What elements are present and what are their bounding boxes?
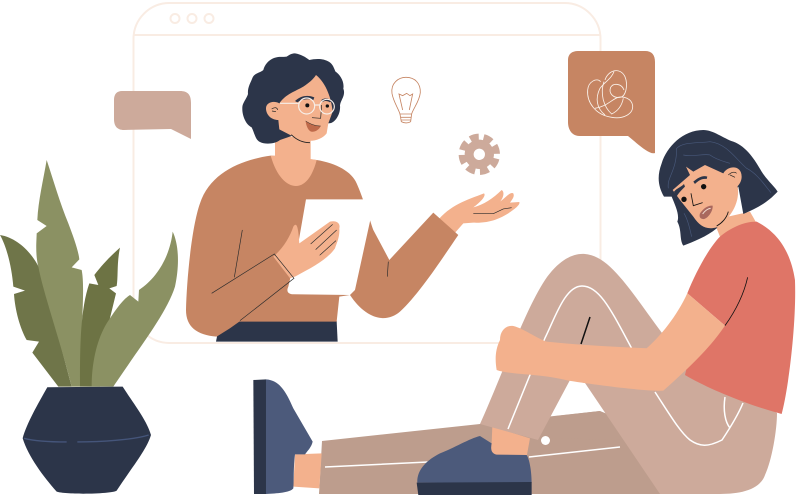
shoe sole: [417, 482, 532, 495]
t-shirt: [685, 222, 795, 414]
icon: gear: [458, 133, 500, 175]
face: [266, 75, 333, 141]
knee crease: [581, 317, 590, 344]
plant: [0, 160, 178, 494]
sweater: [186, 156, 458, 337]
speech bubble: left: [114, 91, 191, 139]
sleeve crease: [725, 277, 748, 326]
facial features: [674, 172, 737, 226]
arm hugging knee: [496, 293, 725, 391]
palm line: [473, 208, 512, 214]
front ankle and shoe: [417, 427, 532, 495]
hair strands: [668, 142, 771, 237]
patient figure: [253, 130, 795, 495]
facial details: [272, 96, 332, 143]
ankle: [293, 453, 322, 488]
shoe sole: [253, 379, 266, 494]
leaf: small dark: [80, 248, 120, 387]
clipboard paper: [287, 199, 371, 295]
neck: [271, 137, 317, 186]
pot: [23, 387, 151, 494]
therapist figure: [186, 53, 519, 342]
hair: [242, 53, 344, 144]
speech bubble: right: [568, 51, 655, 153]
shoe upper: [417, 436, 532, 483]
trouser seams: [508, 286, 743, 445]
glasses: [280, 98, 334, 114]
neck: [713, 212, 757, 237]
browser window frame: [134, 3, 600, 343]
leaf: right: [92, 232, 178, 387]
hair: [659, 130, 778, 246]
icon: tangled thought: [588, 71, 633, 118]
face: [673, 165, 742, 228]
icon: light bulb: [392, 77, 420, 123]
bubble shape: [568, 51, 655, 153]
trousers: [216, 321, 338, 342]
ankle: [491, 427, 530, 457]
pot rim line: [24, 435, 149, 442]
white dot: [541, 436, 550, 445]
far leg seam: [325, 447, 620, 467]
far leg: [319, 411, 720, 494]
arm and finger lines: [212, 224, 388, 321]
near leg: [480, 254, 777, 494]
open hand: [437, 190, 519, 237]
hand on paper: [273, 221, 340, 278]
far-leg sliver under knee: [547, 411, 620, 440]
leaf: centre: [36, 160, 83, 387]
shoe upper: [266, 379, 313, 494]
back shoe: [253, 379, 322, 494]
leaf: back left: [0, 235, 72, 387]
